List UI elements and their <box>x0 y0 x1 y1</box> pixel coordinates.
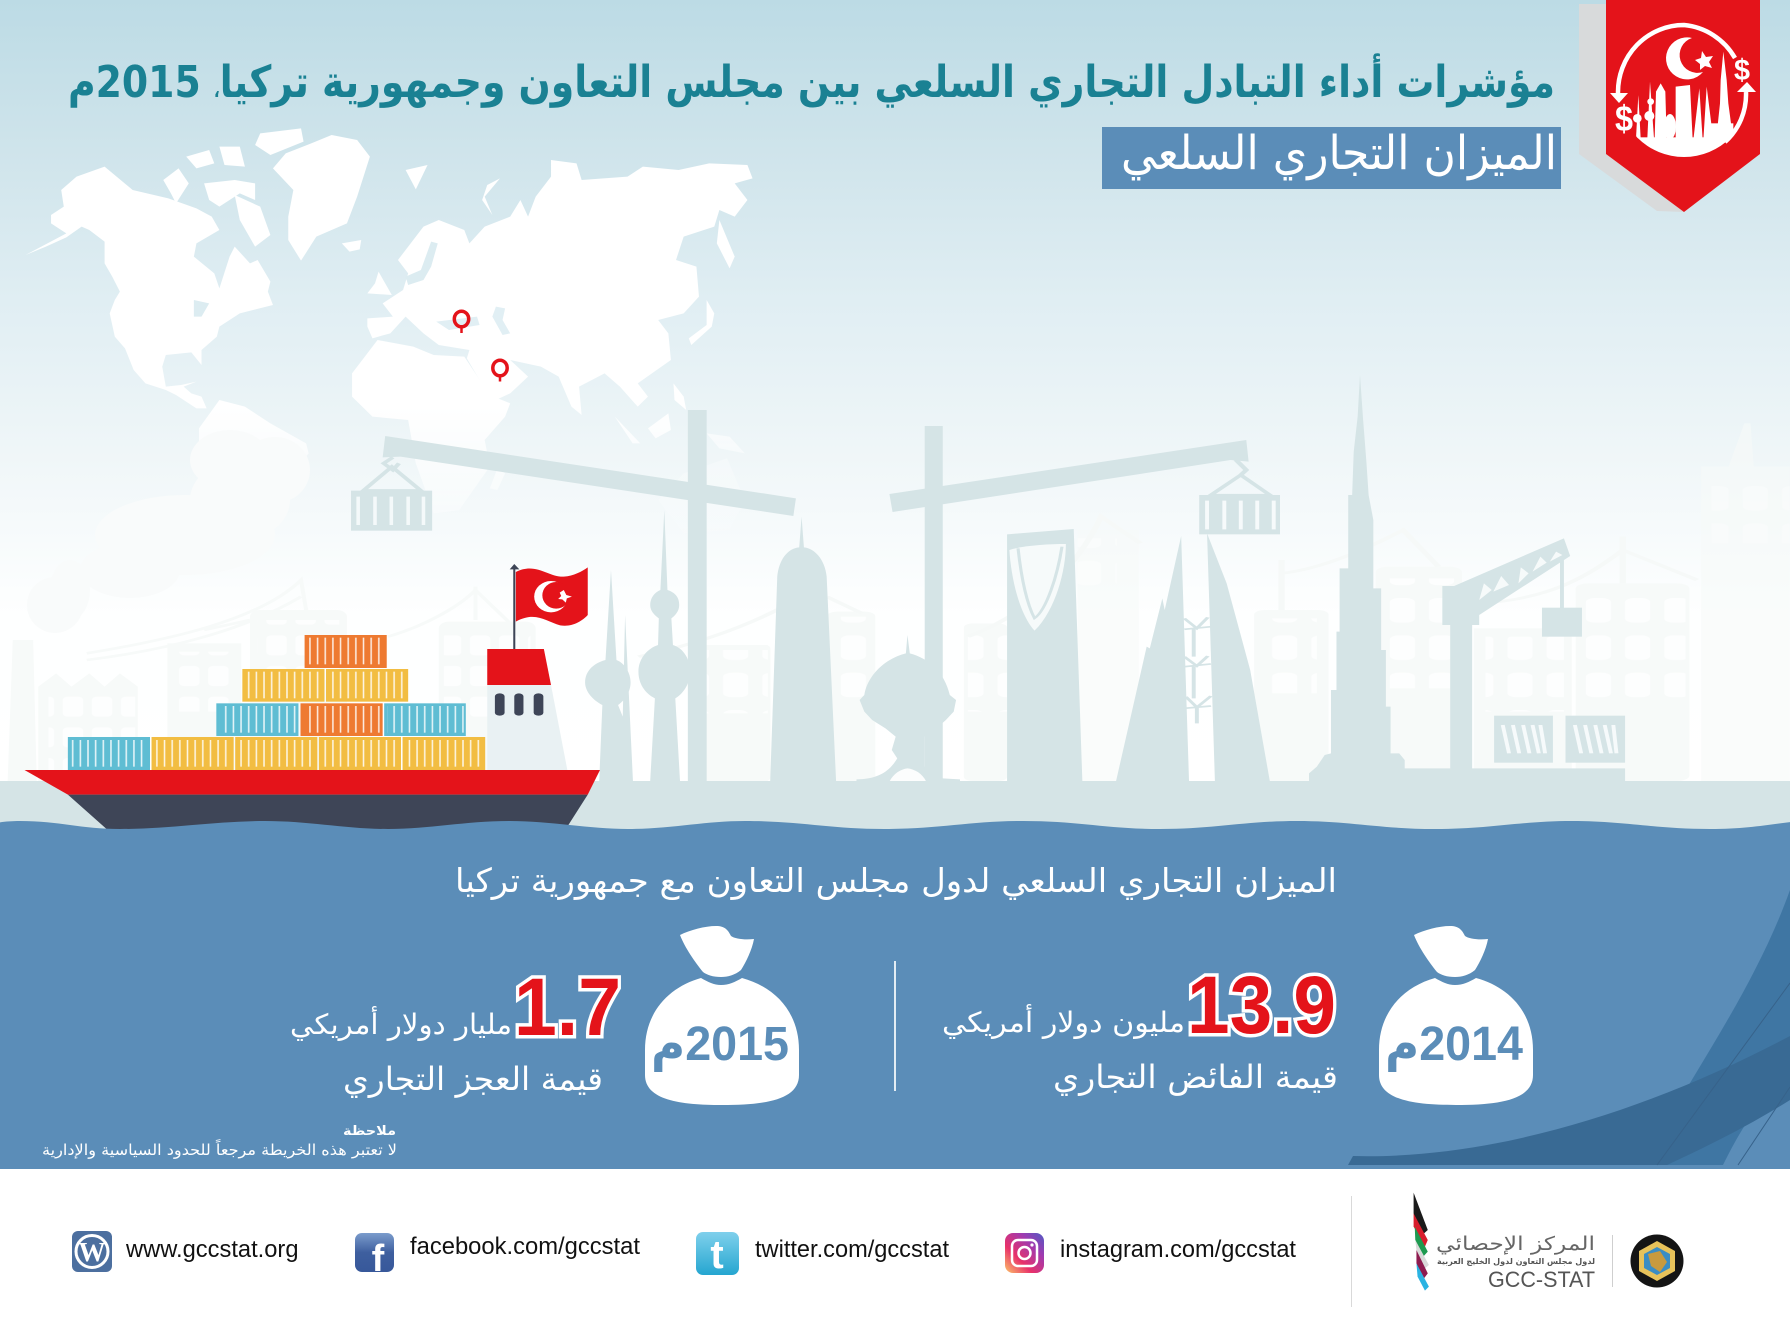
kuwait towers <box>638 510 690 781</box>
logo dollar left: $ <box>1615 98 1633 139</box>
banner logo <box>1610 25 1756 161</box>
dock crane cable <box>1560 558 1564 608</box>
map: eurasia <box>367 160 753 415</box>
section heading: الميزان التجاري السلعي لدول مجلس التعاون مع جمهورية تركيا <box>455 861 1337 900</box>
decorative sail shapes corner <box>1348 890 1790 1165</box>
containers bottom row <box>68 737 485 770</box>
icon: wordpress <box>72 1231 112 1272</box>
note heading: ملاحظة <box>343 1124 396 1139</box>
gcc emblem <box>1630 1234 1684 1288</box>
containers second row <box>216 703 466 736</box>
logo gcc-stat: GCC-STAT <box>1488 1267 1595 1292</box>
quay ground <box>0 781 1790 833</box>
hull red <box>24 770 600 795</box>
sea <box>0 821 1790 1169</box>
bridge tower <box>487 685 567 770</box>
kingdom tower inner line <box>1018 547 1062 618</box>
website link: www.gccstat.org <box>125 1236 298 1263</box>
subtitle text: الميزان التجاري السلعي <box>1121 126 1557 181</box>
ground slope at ship bow <box>550 781 620 840</box>
crane 2 beam <box>889 440 1249 512</box>
map: australia <box>658 458 745 533</box>
map: japan <box>689 300 714 345</box>
faint city backdrop right <box>638 423 1790 781</box>
building 3 <box>439 622 536 781</box>
sail mid blue <box>1650 890 1790 1165</box>
turkish flag <box>516 567 588 626</box>
logo skyline <box>1630 52 1737 161</box>
red banner shadow <box>1579 4 1684 212</box>
faint building a <box>705 645 768 781</box>
bag 2014 <box>1379 926 1533 1105</box>
building 1 <box>167 643 241 781</box>
sail dark band <box>1348 1036 1790 1165</box>
containers top row <box>305 635 387 668</box>
crane 2 post <box>925 426 943 782</box>
dock crane lattice <box>1479 552 1562 600</box>
facebook link: facebook.com/gccstat <box>410 1233 640 1260</box>
map: svalbard <box>406 165 428 189</box>
icon: facebook <box>355 1233 394 1280</box>
dome arch opening <box>889 768 926 782</box>
map: arctic islands <box>148 128 304 247</box>
world map <box>26 128 753 533</box>
map pin turkey <box>454 311 469 333</box>
footer divider <box>1351 1196 1352 1307</box>
factory houses <box>38 673 138 781</box>
dock container 1 <box>1494 716 1553 763</box>
map: africa <box>352 340 510 513</box>
logo arabic sub-name: لدول مجلس التعاون لدول الخليج العربية <box>1437 1257 1595 1267</box>
map: uk <box>367 272 392 295</box>
icon: instagram <box>1005 1233 1044 1273</box>
map: north america <box>26 167 273 408</box>
smoke clouds behind ship <box>27 430 310 633</box>
icon: facebook: f <box>372 1238 385 1280</box>
crane 1 post <box>688 410 707 782</box>
map: caspian sea <box>492 307 510 335</box>
kingdom tower <box>1007 529 1082 781</box>
main title: مؤشرات أداء التبادل التجاري السلعي بين مجلس التعاون وجمهورية تركيا، 2015م <box>68 53 1555 108</box>
sail thin lines <box>1657 983 1790 1165</box>
dock crane load <box>1542 608 1582 637</box>
domed tower <box>856 635 960 782</box>
faint building h <box>1576 583 1689 781</box>
map: black sea <box>436 317 480 330</box>
note text: لا تعتبر هذه الخريطة مرجعاً للحدود السياسية والإدارية <box>42 1139 397 1159</box>
logo arrow left <box>1610 93 1628 103</box>
subtitle box <box>1102 126 1561 189</box>
bahrain wtc right sail <box>1207 533 1270 781</box>
cargo ship <box>24 564 600 835</box>
building 2 <box>250 610 347 781</box>
faint building c <box>964 623 1007 781</box>
map: baltic sea <box>406 242 438 285</box>
landmark skyline and cranes <box>585 375 1625 782</box>
bridge windows <box>495 693 543 716</box>
bag 2015 label: 2015م <box>651 1018 789 1072</box>
logo star <box>1695 51 1713 70</box>
footer band <box>0 1169 1790 1324</box>
crane 2 container <box>1199 495 1280 534</box>
faint building b <box>827 612 875 781</box>
map pin saudi/gulf <box>493 360 507 382</box>
faint building d <box>1078 530 1139 781</box>
crane 1 container <box>351 491 432 531</box>
map: new guinea <box>707 433 745 453</box>
deficit label: قيمة العجز التجاري <box>343 1060 603 1098</box>
map: sakhalin <box>717 220 735 268</box>
map: south america <box>199 400 309 533</box>
map: madagascar <box>490 468 505 490</box>
suspension cables <box>87 580 510 660</box>
logo arc top <box>1618 25 1735 93</box>
bag 2015 <box>645 926 799 1105</box>
red banner <box>1606 0 1760 212</box>
kingdom tower opening <box>1009 544 1066 631</box>
map: novaya zemlya <box>482 178 500 215</box>
crane 1 beam <box>383 436 796 516</box>
burj doha <box>770 517 836 781</box>
map: greenland <box>273 135 370 261</box>
map: sumatra <box>615 417 640 443</box>
deficit value: 1.7 <box>514 962 621 1053</box>
hull dark <box>68 795 588 835</box>
crane 1 beam and container <box>351 436 796 531</box>
faint city backdrop left <box>8 580 770 781</box>
logo dollar right: $ <box>1734 54 1750 87</box>
logo divider <box>1612 1235 1613 1287</box>
bag 2014 label: 2014م <box>1385 1018 1523 1072</box>
faint building g <box>1474 628 1572 781</box>
crane 1 hook and slings <box>363 457 421 491</box>
faint tall building <box>1701 423 1790 781</box>
map: philippines <box>673 383 686 410</box>
map: iceland <box>342 240 361 252</box>
bahrain wtc bridges <box>1184 617 1211 723</box>
logo arc bottom right <box>1725 92 1746 142</box>
surplus value: 13.9 <box>1187 960 1336 1051</box>
burj khalifa <box>1309 375 1625 782</box>
icon: wordpress: W <box>78 1237 106 1267</box>
deficit unit: مليار دولار أمريكي <box>290 1005 512 1041</box>
instagram link: instagram.com/gccstat <box>1060 1236 1296 1263</box>
crane 2 hook and slings <box>1211 460 1270 495</box>
twitter link: twitter.com/gccstat <box>755 1236 949 1263</box>
faint building e <box>1254 610 1329 781</box>
containers third row <box>242 669 408 702</box>
dock crane post <box>1450 625 1472 770</box>
icon: twitter <box>696 1232 739 1277</box>
faint bridge cables <box>638 517 1697 657</box>
chimney <box>8 640 37 781</box>
map: great lakes <box>194 300 209 317</box>
logo moon <box>1666 37 1703 79</box>
surplus unit: مليون دولار أمريكي <box>942 1003 1185 1039</box>
map: borneo <box>648 413 671 438</box>
center divider <box>894 961 896 1091</box>
bridge funnel <box>487 649 551 685</box>
logo arrow right <box>1737 82 1756 92</box>
logo ribbon <box>1414 1193 1429 1291</box>
flag mast <box>510 564 519 649</box>
bahrain wtc left sail <box>1116 536 1189 781</box>
dock container 2 <box>1565 716 1625 763</box>
surplus label: قيمة الفائض التجاري <box>1053 1058 1338 1096</box>
icon: twitter: t <box>710 1233 724 1277</box>
faint building f <box>1376 567 1462 781</box>
building 4 <box>704 645 770 781</box>
dock crane arm <box>1442 538 1570 625</box>
logo arabic name: المركز الإحصائي <box>1436 1233 1595 1255</box>
